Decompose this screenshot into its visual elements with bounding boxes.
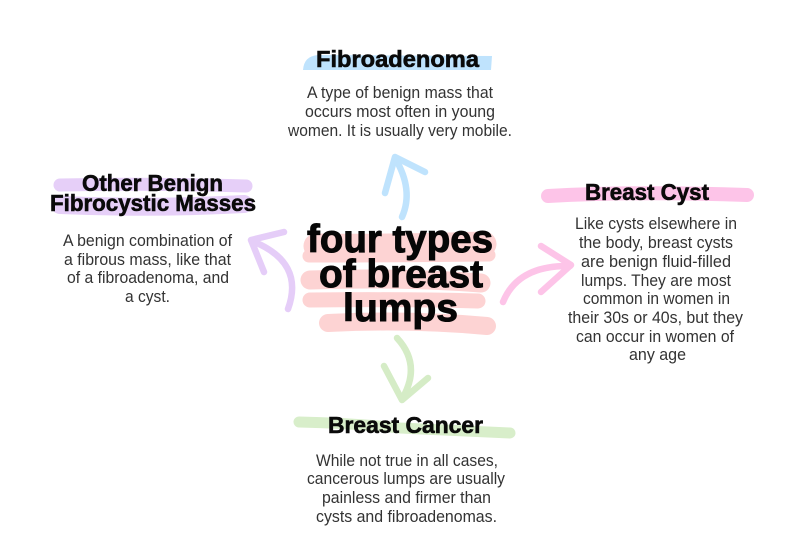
title (307, 218, 493, 330)
title highlight (309, 244, 489, 326)
text block: breast cyst description: the body, breast cysts (579, 233, 733, 252)
heading: other benign fibrocystic masses (50, 170, 256, 216)
panel: breast cancer (299, 412, 510, 526)
text block: fibroadenoma description: occurs most often in young (305, 102, 495, 121)
heading: fibroadenoma: Fibroadenoma (316, 46, 479, 72)
text block: breast cancer description: cysts and fibroadenomas. (316, 507, 497, 526)
text block: other benign description: of a fibroadenoma, and (67, 268, 229, 287)
text block: other benign description: a fibrous mass, like that (64, 250, 231, 269)
arrow: pink, to breast cyst (503, 246, 571, 302)
text block: breast cyst description: can occur in women of (576, 327, 734, 346)
arrow: green, down to breast cancer (384, 338, 428, 400)
heading: other benign fibrocystic masses: Fibrocystic Masses (50, 190, 256, 216)
arrow: purple, to other benign masses (251, 232, 292, 309)
heading: breast cyst: Breast Cyst (585, 179, 709, 205)
title: of breast (319, 253, 483, 296)
text block: fibroadenoma description: women. It is usually very mobile. (287, 121, 512, 140)
text block: breast cyst description: are benign fluid-filled (581, 252, 731, 271)
text block: breast cancer description: While not true in all cases, (316, 451, 498, 470)
panel: central title (307, 218, 493, 330)
text block: breast cyst description: Like cysts elsewhere in (575, 214, 737, 233)
text block: breast cyst description: any age (629, 345, 686, 364)
text block: breast cancer description: painless and firmer than (322, 488, 491, 507)
text block: other benign description: A benign combination of (63, 231, 232, 250)
text block: breast cancer description: cancerous lumps are usually (307, 469, 505, 488)
title: lumps (343, 287, 458, 330)
text block: fibroadenoma description (287, 83, 512, 140)
text block: breast cyst description (568, 214, 743, 364)
text block: breast cyst description: common in women in (583, 289, 730, 308)
panel: fibroadenoma (287, 46, 512, 140)
text block: breast cyst description: their 30s or 40s, but they (568, 308, 743, 327)
title: four types (307, 218, 493, 261)
heading: other benign fibrocystic masses: Other Benign (82, 170, 223, 196)
heading highlight: breast cancer (299, 422, 510, 433)
heading highlight: fibroadenoma (303, 55, 492, 70)
heading highlight: breast cyst (548, 193, 747, 196)
arrow: blue, up to fibroadenoma (385, 157, 425, 217)
heading highlight: other benign (60, 184, 246, 207)
text block: breast cyst description: lumps. They are most (581, 271, 731, 290)
text block: breast cancer description (307, 451, 505, 526)
panel: breast cyst (548, 179, 747, 364)
heading: breast cancer: Breast Cancer (328, 412, 483, 438)
text block: other benign description (63, 231, 232, 306)
text block: fibroadenoma description: A type of benign mass that (307, 83, 493, 102)
text block: other benign description: a cyst. (125, 287, 170, 306)
panel: other benign fibrocystic masses (50, 170, 256, 306)
